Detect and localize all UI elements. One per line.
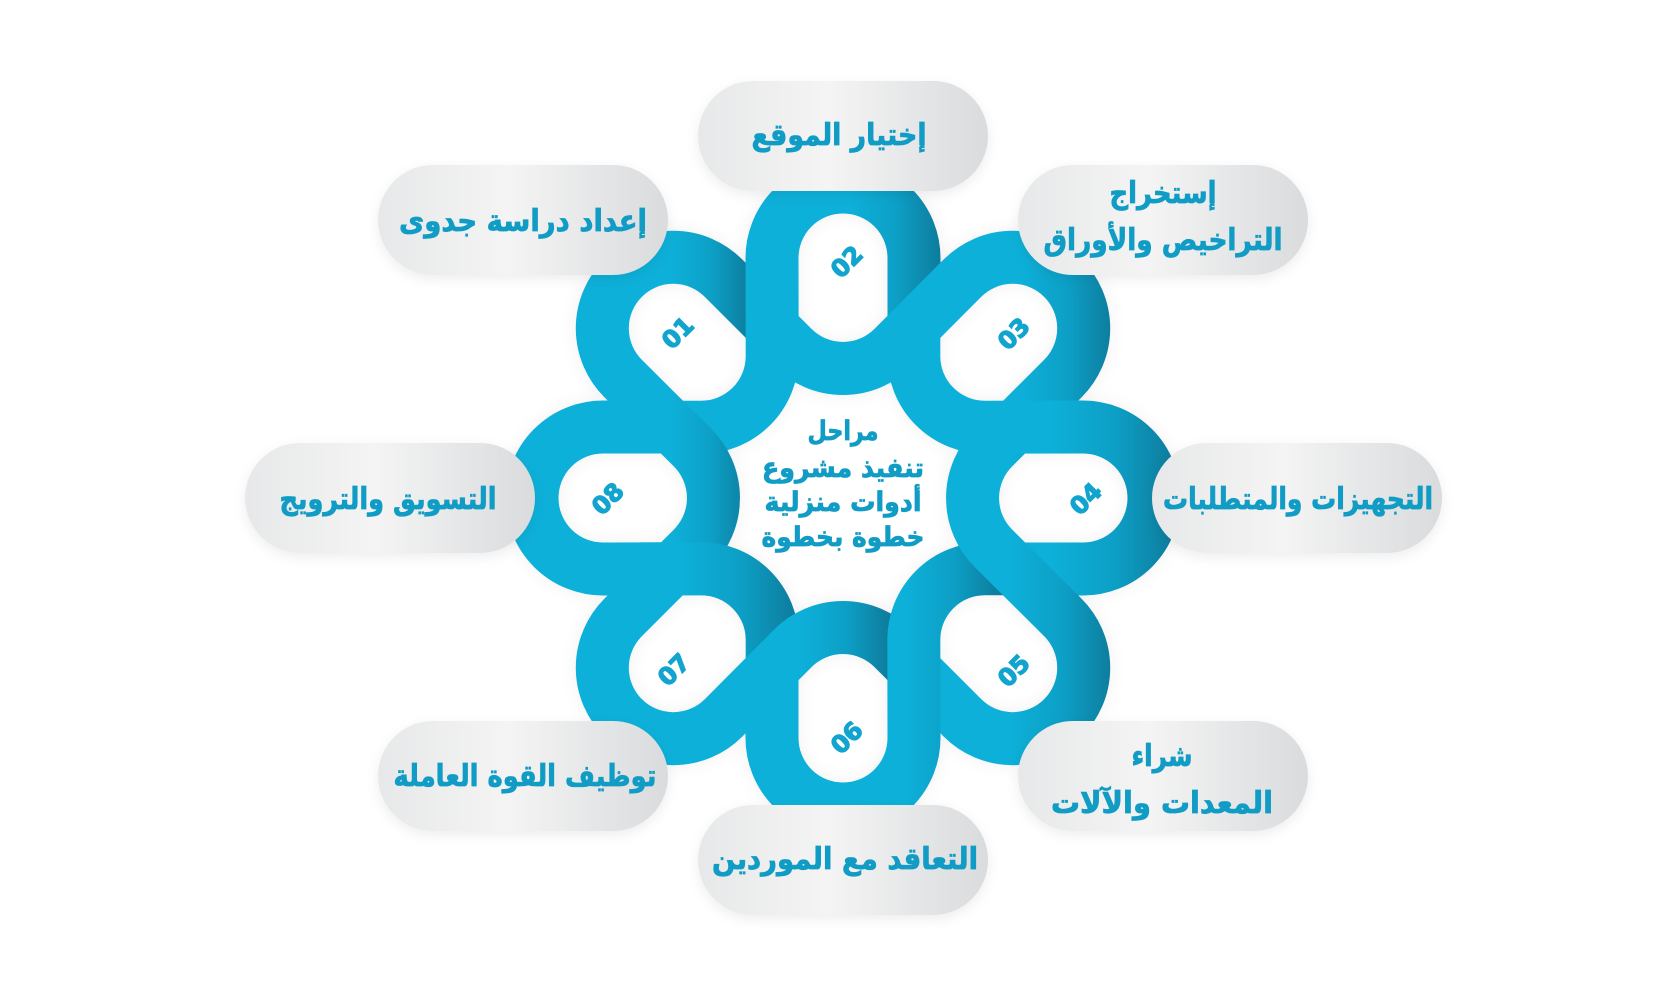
number 02: 02 — [825, 240, 869, 284]
number 08: 08 — [586, 477, 630, 521]
pill: step 03 — [1018, 165, 1308, 275]
pill: step 06: التعاقد مع الموردين — [712, 842, 978, 877]
center title — [762, 416, 924, 553]
pill: step 07: توظيف القوة العاملة — [394, 759, 656, 794]
pill: step 03: إستخراج — [1110, 176, 1216, 211]
pill: step 02: إختيار الموقع — [752, 118, 926, 153]
center title: أدوات منزلية — [764, 484, 922, 518]
pill: step 04 — [1152, 443, 1442, 553]
ribbon: outer end and returning strips — [532, 187, 1154, 809]
pill: step 05: المعدات والآلات — [1051, 786, 1273, 821]
pill: step 01: إعداد دراسة جدوى — [399, 204, 647, 239]
woven ribbon ring — [515, 191, 1172, 805]
pill: step 08 — [245, 443, 535, 553]
center title: مراحل — [808, 416, 878, 447]
pill: step 05 — [1018, 721, 1308, 831]
number 07: 07 — [652, 648, 696, 692]
number 01: 01 — [656, 311, 700, 355]
pill: step 06 — [698, 805, 988, 915]
pill: step 02 — [698, 81, 988, 191]
pill: step 01 — [378, 165, 668, 275]
number 04: 04 — [1064, 477, 1108, 521]
center title: تنفيذ مشروع — [762, 453, 924, 484]
pill: step 05: شراء — [1132, 739, 1192, 774]
number 06: 06 — [825, 716, 869, 760]
ribbon: overlapping strips and inner arcs — [515, 191, 1172, 805]
pill: step 04: التجهيزات والمتطلبات — [1163, 482, 1433, 517]
number 03: 03 — [992, 312, 1036, 356]
pill: step 08: التسويق والترويج — [280, 482, 496, 517]
pill: step 07 — [378, 721, 668, 831]
step numbers — [586, 240, 1108, 760]
center title: خطوة بخطوة — [762, 522, 924, 553]
pill: step 03: التراخيص والأوراق — [1044, 221, 1282, 258]
number 05: 05 — [992, 649, 1036, 693]
